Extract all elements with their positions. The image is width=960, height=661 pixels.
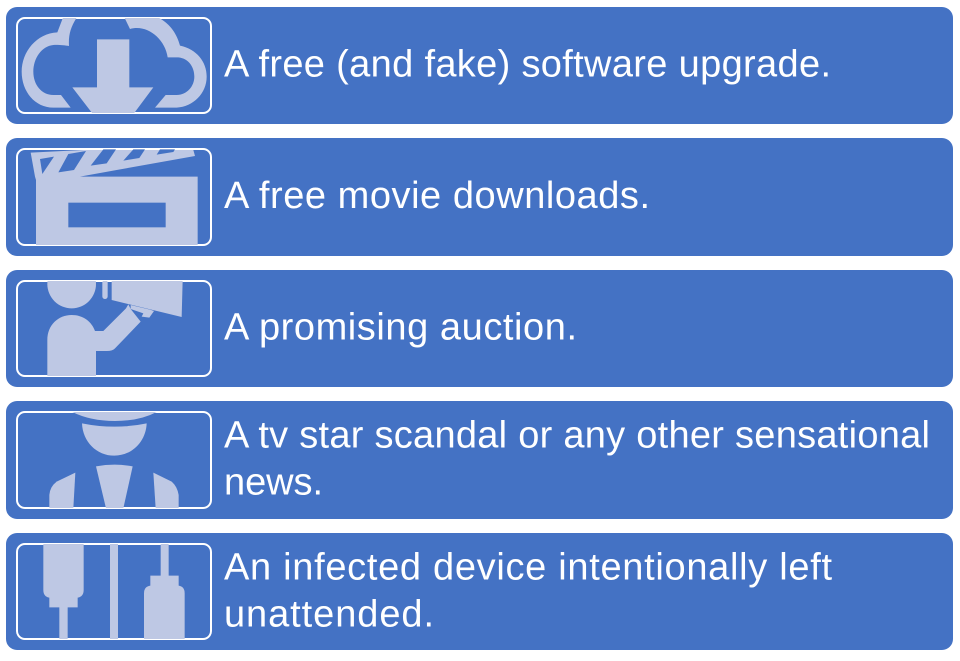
icon: cloud download <box>22 17 207 113</box>
panel background <box>6 270 953 387</box>
icon frame <box>17 149 211 245</box>
label: software upgrade: A free (and fake) software upgrade. <box>224 44 831 86</box>
panel background <box>6 533 953 650</box>
icon: tv star in suit <box>49 412 179 508</box>
icon frame <box>17 281 211 376</box>
icon frame <box>17 18 211 113</box>
label: sensational news <box>224 414 930 504</box>
panel: auction <box>6 260 953 387</box>
panel background <box>6 401 953 519</box>
text line 1: An infected device intentionally left <box>224 546 832 588</box>
label: infected device <box>224 546 832 636</box>
label: auction: A promising auction. <box>224 306 577 348</box>
panel background <box>6 7 953 124</box>
icon: film clapperboard <box>31 149 198 247</box>
label: movie downloads: A free movie downloads. <box>224 175 650 217</box>
text line 1: A tv star scandal or any other sensational <box>224 414 930 456</box>
icon: USB plugs <box>43 543 185 640</box>
icon frame <box>17 412 211 508</box>
panel: sensational news <box>6 401 953 519</box>
text line 2: unattended. <box>224 594 434 636</box>
icon frame <box>17 544 211 639</box>
panel: infected device <box>6 533 953 650</box>
icon: person with megaphone <box>47 281 183 376</box>
panel background <box>6 138 953 256</box>
panel: movie downloads <box>6 138 953 256</box>
text line 2: news. <box>224 462 323 504</box>
panel: software upgrade <box>6 7 953 124</box>
